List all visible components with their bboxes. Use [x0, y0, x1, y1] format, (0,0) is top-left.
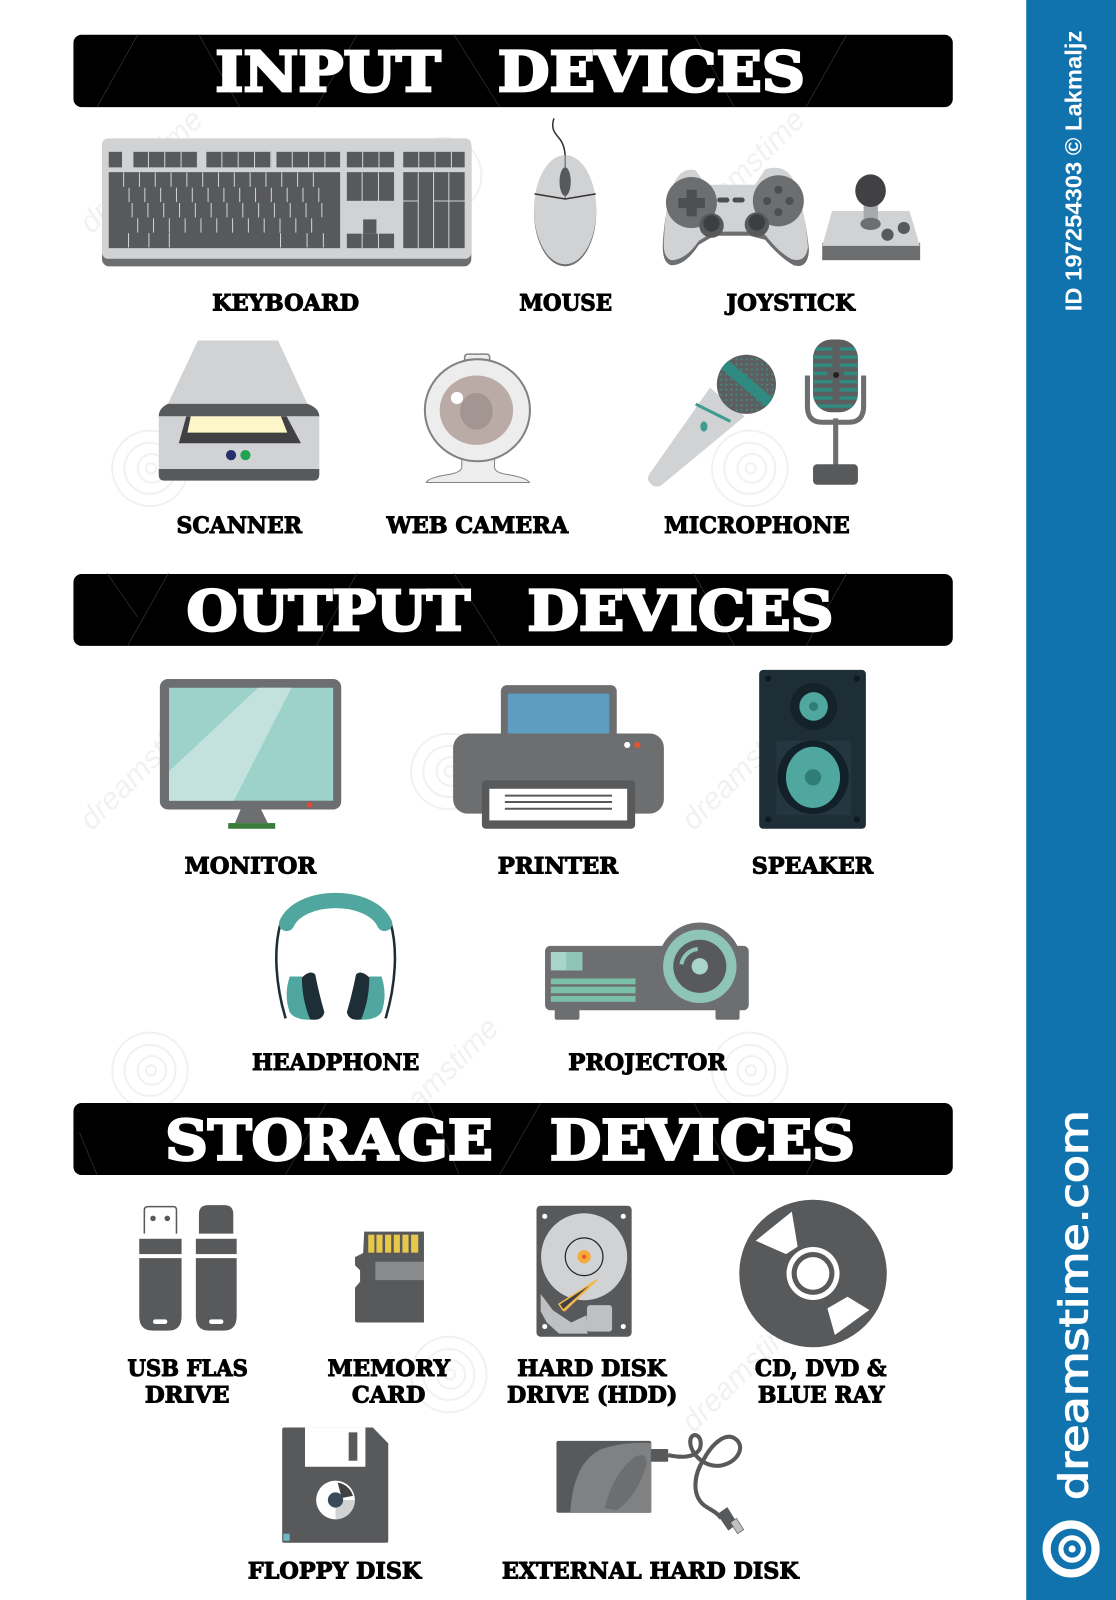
label: monitor: MONITOR	[185, 853, 317, 879]
icon: mouse	[534, 118, 596, 266]
label: scanner: SCANNER	[176, 513, 302, 539]
icon: printer	[453, 685, 664, 829]
dreamstime wordmark: dreamstime.com	[1052, 1110, 1097, 1500]
label: projector: PROJECTOR	[568, 1050, 727, 1076]
label: memory card: MEMORY	[327, 1356, 451, 1382]
watermark: dreamstime	[675, 103, 812, 240]
label: usb flash drive	[128, 1356, 248, 1408]
icon: monitor	[160, 679, 341, 829]
label: web camera: WEB CAMERA	[386, 513, 569, 539]
watermark: dreamstime	[675, 1302, 812, 1439]
icon: gamepad	[663, 168, 809, 266]
heading: storage devices: DEVICES	[550, 1108, 855, 1173]
label: hard disk drive	[507, 1356, 677, 1408]
label: usb flash drive: DRIVE	[145, 1382, 230, 1408]
heading: input devices: INPUT	[215, 39, 441, 104]
icon: speaker	[759, 670, 866, 829]
icon: handheld microphone	[648, 355, 776, 487]
label: printer: PRINTER	[498, 853, 619, 879]
icon: web camera	[425, 354, 530, 482]
heading: storage devices: STORAGE	[165, 1108, 493, 1173]
heading: input devices	[73, 35, 953, 107]
label: mouse: MOUSE	[519, 291, 612, 317]
icon: headphones	[276, 901, 395, 1020]
watermark	[73, 103, 812, 1439]
heading: input devices: DEVICES	[498, 39, 805, 104]
label: joystick: JOYSTICK	[724, 291, 856, 317]
icon: keyboard	[102, 138, 471, 266]
heading: storage devices	[73, 1103, 953, 1175]
label: usb flash drive: USB FLAS	[128, 1356, 248, 1382]
heading: output devices: OUTPUT	[187, 578, 470, 643]
label: floppy disk: FLOPPY DISK	[248, 1558, 423, 1584]
section: input devices	[73, 35, 953, 539]
sidebar: dreamstime banner	[1026, 0, 1116, 1600]
label: hard disk drive: HARD DISK	[517, 1356, 668, 1382]
icon: studio microphone	[807, 339, 864, 485]
label: cd dvd blue ray: CD, DVD &	[755, 1356, 886, 1382]
section: output devices	[73, 573, 953, 1076]
label: cd dvd blue ray: BLUE RAY	[758, 1382, 885, 1408]
watermark: dreamstime	[73, 700, 210, 837]
label: memory card: CARD	[352, 1382, 425, 1408]
icon: swirl logo	[1047, 1524, 1096, 1573]
heading: output devices	[73, 573, 953, 646]
icon: arcade stick	[822, 174, 920, 260]
label: speaker: SPEAKER	[752, 853, 874, 879]
label: cd dvd blue ray	[755, 1356, 886, 1408]
label: microphone: MICROPHONE	[664, 513, 850, 539]
heading: output devices: DEVICES	[527, 578, 833, 643]
icon: projector	[545, 922, 749, 1020]
icon: external hard disk	[556, 1435, 744, 1534]
icon: scanner	[159, 341, 319, 481]
icon: optical disc	[739, 1200, 887, 1347]
icon: memory card	[355, 1232, 424, 1322]
image id credit: ID 197254303 © Lakmaljz	[1060, 31, 1086, 311]
label: keyboard: KEYBOARD	[212, 291, 359, 317]
watermark: dreamstime	[675, 700, 812, 837]
icon: usb flash drives	[139, 1205, 237, 1331]
label: hard disk drive: DRIVE (HDD)	[507, 1382, 677, 1408]
label: headphone: HEADPHONE	[252, 1050, 419, 1076]
watermark: dreamstime	[73, 103, 210, 240]
icon: floppy disk	[282, 1428, 388, 1543]
section: storage devices	[73, 1103, 953, 1584]
watermark: dreamstime	[369, 1011, 506, 1148]
label: external hard disk: EXTERNAL HARD DISK	[502, 1558, 800, 1584]
label: memory card	[327, 1356, 451, 1408]
icon: hard disk drive	[536, 1206, 632, 1337]
